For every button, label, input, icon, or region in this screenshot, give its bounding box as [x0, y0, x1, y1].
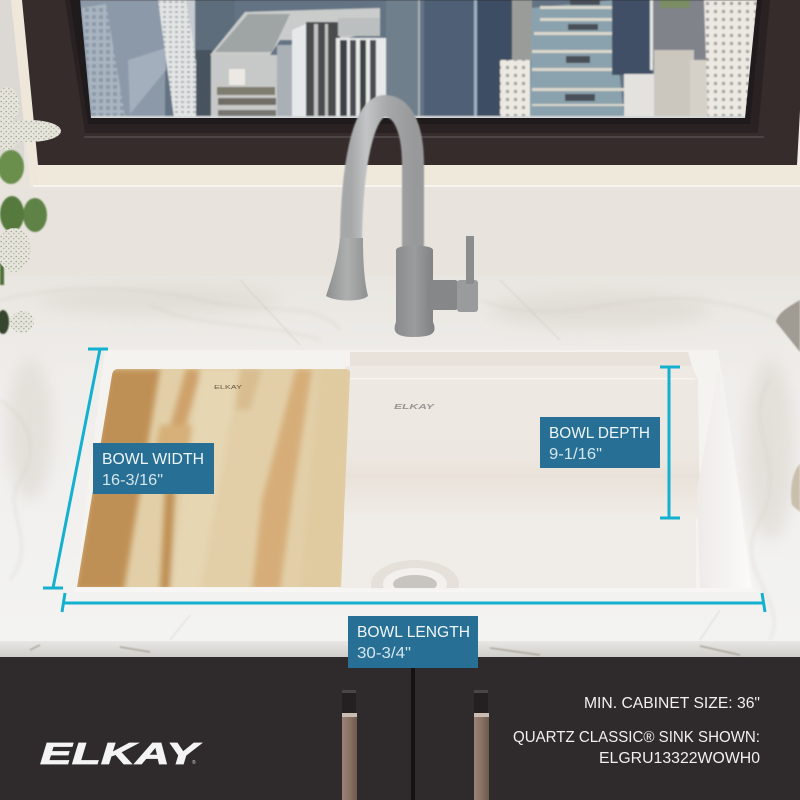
dimension: bowl length	[62, 593, 765, 612]
cutting board: ELKAY	[214, 385, 243, 391]
cabinets	[0, 657, 800, 800]
faucet spray head	[326, 238, 368, 300]
note: cabinet size and model: MIN. CABINET SIZE: 36"	[584, 695, 760, 712]
dimension: bowl width	[43, 349, 108, 588]
label: bowl length	[348, 616, 478, 668]
logo on sink: ELKAY	[394, 402, 436, 411]
window sill	[0, 165, 800, 280]
bowl right wall	[697, 372, 752, 590]
label: bowl width	[93, 443, 214, 494]
cabinet handle right	[474, 690, 489, 800]
note: cabinet size and model: QUARTZ CLASSIC® SINK SHOWN:	[513, 729, 760, 746]
faucet body	[395, 246, 435, 337]
label: bowl length: 30-3/4"	[357, 645, 411, 662]
faucet at right edge	[776, 300, 800, 512]
label: bowl depth: 9-1/16"	[549, 446, 602, 463]
sink	[105, 350, 752, 588]
plant	[0, 87, 61, 334]
faucet lever	[466, 234, 474, 284]
cabinet handle left	[342, 690, 357, 800]
label: bowl depth: BOWL DEPTH	[549, 425, 650, 442]
label: bowl length: BOWL LENGTH	[357, 624, 470, 641]
window with city view	[22, 0, 800, 165]
brand logo: ELKAY	[40, 736, 203, 771]
faucet	[326, 106, 478, 337]
counter front edge	[0, 641, 800, 658]
marble countertop	[0, 276, 800, 641]
brand logo: ®	[192, 759, 196, 766]
cutting board	[75, 369, 350, 590]
label: bowl width: BOWL WIDTH	[102, 451, 204, 468]
label: bowl depth	[540, 417, 660, 468]
background wall	[0, 0, 800, 280]
faucet spout	[351, 106, 413, 258]
note: cabinet size and model: ELGRU13322WOWH0	[599, 750, 760, 767]
bowl back wall	[345, 366, 700, 518]
note: cabinet size and model	[513, 695, 760, 767]
bowl floor	[341, 515, 696, 588]
dimension: bowl depth	[660, 367, 680, 518]
city view	[80, 0, 760, 120]
brand logo	[40, 736, 203, 771]
drain	[371, 560, 459, 588]
label: bowl width: 16-3/16"	[102, 472, 163, 489]
bottom rim	[73, 588, 757, 592]
